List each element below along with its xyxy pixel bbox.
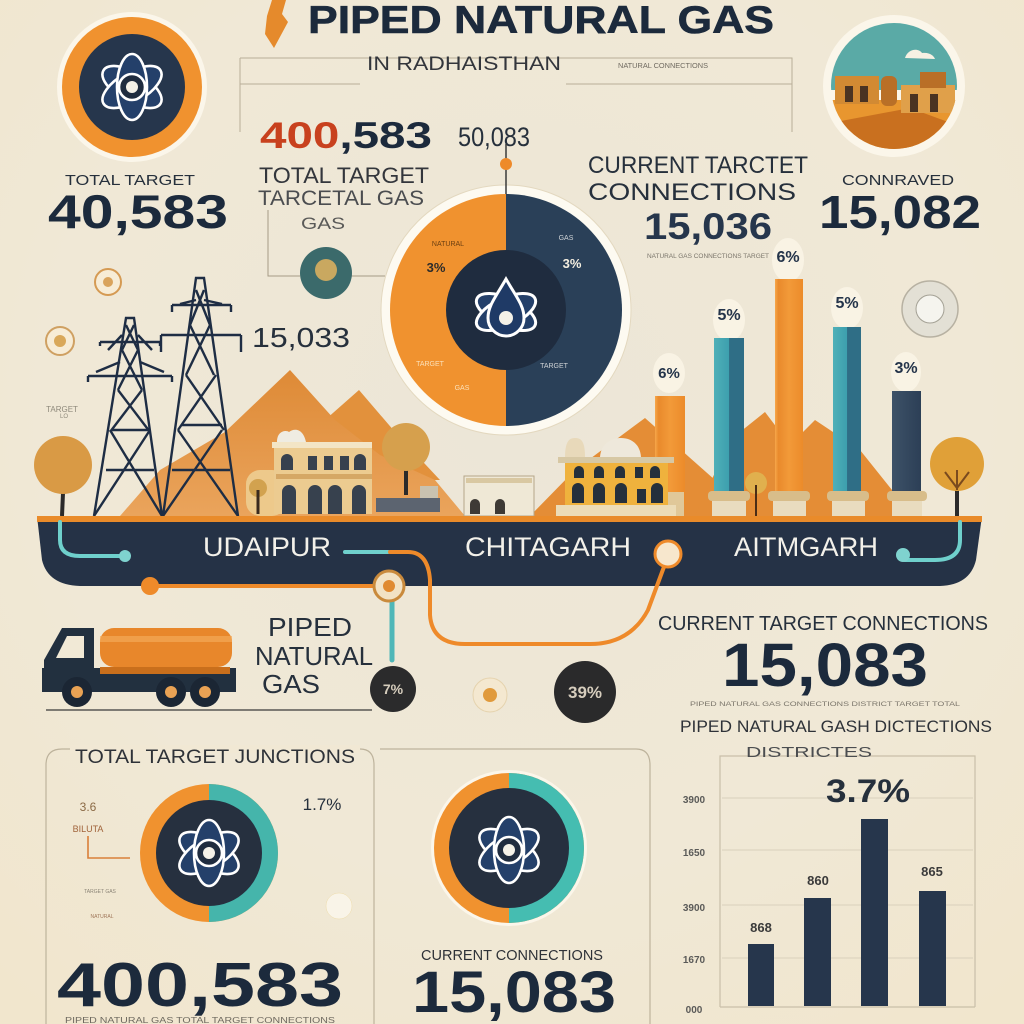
icon: desert fort badge	[820, 15, 970, 157]
bar column: teal 1: 5%	[717, 307, 741, 324]
bar column: teal 2: 5%	[835, 295, 859, 312]
pie chart: 3%	[563, 256, 582, 271]
small icons left: LO	[60, 414, 68, 420]
icon: right tree	[930, 437, 984, 516]
truck label: NATURAL	[255, 641, 373, 671]
icon: palace right and short column	[556, 353, 685, 516]
stat: current target connections: NATURAL GAS CONNECTIONS TARGET	[647, 254, 769, 260]
stat: total target centre-left: GAS	[301, 214, 345, 233]
icon: gauge	[902, 281, 958, 337]
side note	[73, 800, 130, 920]
axis labels	[683, 795, 706, 1016]
panel: district bar chart	[680, 717, 992, 1016]
stat: total target left: TOTAL TARGET	[65, 172, 195, 189]
stat: total target left: 40,583	[48, 185, 228, 238]
panel: total target: TOTAL TARGET JUNCTIONS	[75, 747, 355, 768]
stat: current target connections lower: CURRENT TARGET CONNECTIONS	[658, 613, 988, 635]
pie chart: TARGET	[416, 361, 445, 368]
stat: total target centre-left: TARCETAL GAS	[258, 187, 424, 210]
panel: current connections: CURRENT CONNECTIONS	[421, 947, 603, 964]
subtitle: NATURAL CONNECTIONS	[618, 63, 708, 70]
badge: 7%	[370, 666, 416, 712]
city band	[37, 516, 982, 586]
stat: current target connections: CURRENT TARCTET	[588, 152, 808, 179]
stat: connected right	[819, 172, 981, 238]
city band: AITMGARH	[734, 532, 878, 562]
bar labels: 865	[921, 864, 943, 879]
value callout: 3.7%	[826, 773, 910, 809]
icon: palace right and short column: 6%	[658, 365, 680, 382]
subtitle	[240, 54, 792, 132]
side note: TARGET GAS	[84, 889, 117, 895]
panel: current connections	[380, 749, 650, 1024]
axis labels: 1650	[683, 848, 706, 859]
side note: BILUTA	[73, 824, 103, 834]
city band: CHITAGARH	[465, 532, 631, 562]
stat: current target connections	[588, 152, 808, 260]
stat: current target connections: CONNECTIONS	[588, 179, 796, 206]
big number: 400,583: 400,583	[57, 951, 343, 1020]
side note: NATURAL	[91, 914, 114, 920]
panel: total target	[46, 745, 374, 1024]
pie chart: NATURAL	[432, 241, 464, 248]
badge: 7%: 7%	[383, 681, 404, 697]
big number: 15,083: 15,083	[412, 960, 616, 1024]
panel: district bar chart: DISTRICTES	[746, 744, 872, 761]
bar column: navy	[887, 352, 927, 516]
label: 1.7%: 1.7%	[303, 795, 341, 814]
icon: palace left	[246, 430, 440, 516]
subtitle: IN RADHAISTHAN	[367, 54, 561, 75]
pie chart: TARGET	[540, 363, 569, 370]
small tree between bars	[745, 472, 767, 516]
icon: low building	[464, 476, 534, 516]
mountains left	[120, 370, 465, 516]
stat: 50,083: 50,083	[458, 122, 530, 152]
bar column: orange: 6%	[776, 249, 800, 266]
bar labels: 868	[750, 920, 772, 935]
axis labels: 1670	[683, 955, 706, 966]
badge: small coin	[473, 678, 507, 712]
bar column: teal 2	[827, 287, 869, 516]
stat: current target connections lower: 15,083	[722, 631, 928, 699]
bar column: navy: 3%	[894, 360, 918, 377]
bars	[748, 819, 946, 1006]
pie chart: GAS	[455, 385, 470, 392]
small icons left	[46, 269, 121, 420]
donut: total target	[140, 784, 278, 922]
stat: connected right: 15,082	[819, 186, 981, 238]
mountains right	[530, 412, 892, 516]
small medallion	[268, 210, 385, 299]
stat: current target connections lower	[658, 613, 988, 708]
stat: total target centre-left: 400 ,583	[260, 115, 432, 156]
icon: gas tanker truck	[42, 628, 372, 710]
icon: pylon right	[161, 278, 241, 516]
icon: left trees	[34, 423, 430, 516]
badge: 39%: 39%	[568, 683, 602, 702]
bar column: orange	[768, 238, 810, 516]
donut: current connections	[431, 770, 587, 926]
bar labels: 860	[807, 873, 829, 888]
pie chart	[381, 144, 631, 435]
bar column: teal 1	[708, 299, 750, 516]
icon: pylon left	[88, 318, 172, 516]
stat: current target connections: 15,036	[644, 206, 772, 247]
pie chart: GAS	[559, 235, 574, 242]
truck label	[255, 612, 373, 699]
axis labels: 3900	[683, 795, 706, 806]
icon: top left atom badge	[57, 12, 207, 162]
stat: total target centre-left	[258, 115, 432, 233]
axis labels: 000	[686, 1005, 703, 1016]
bar labels	[750, 864, 943, 935]
pie chart: 3%	[427, 260, 446, 275]
stat: total target left	[48, 172, 228, 238]
small icons left: TARGET	[46, 405, 78, 414]
truck label: GAS	[262, 669, 320, 699]
title: PIPED NATURAL GAS	[308, 0, 774, 42]
stat: current target connections lower: PIPED NATURAL GAS CONNECTIONS DISTRICT TARGET TOTAL	[690, 702, 961, 708]
stat: connected right: CONNRAVED	[842, 172, 954, 189]
city band: UDAIPUR	[203, 532, 331, 562]
axis labels: 3900	[683, 903, 706, 914]
panel: district bar chart: PIPED NATURAL GASH DICTECTIONS	[680, 717, 992, 736]
truck label: PIPED	[268, 612, 352, 642]
stat: total target centre-left: TOTAL TARGET	[259, 163, 429, 188]
side note: 3.6	[80, 800, 97, 814]
stat: 15,033: 15,033	[252, 322, 350, 353]
badge: 39%	[554, 661, 616, 723]
pipeline	[60, 522, 960, 660]
